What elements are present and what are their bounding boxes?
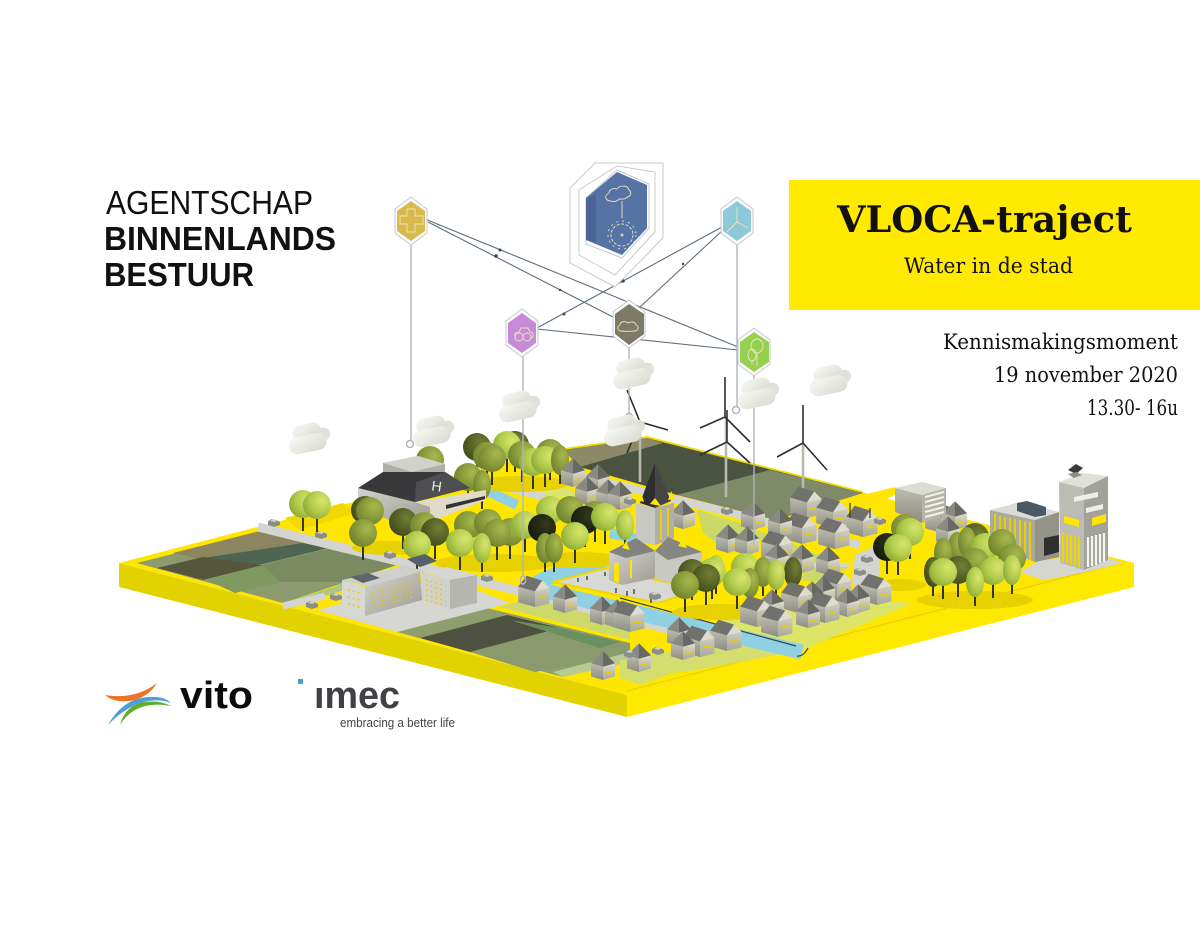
window grids bbox=[348, 580, 446, 608]
walls bbox=[358, 488, 430, 522]
farmland: middle front field bbox=[397, 608, 630, 677]
platform: isometric yellow town base bbox=[119, 436, 1134, 717]
large hospital building with windows bbox=[342, 554, 477, 616]
event details text: Kennismakingsmoment bbox=[943, 330, 1179, 354]
plazas bbox=[285, 503, 1122, 632]
clouds bbox=[287, 356, 852, 456]
title panel: VLOCA-traject bbox=[789, 180, 1200, 310]
cars on roads bbox=[268, 497, 873, 658]
hexagon: green (trees) bbox=[738, 328, 770, 376]
icon: cloud and gear bbox=[606, 186, 636, 249]
nave right bbox=[655, 551, 702, 583]
turbine 1 bbox=[627, 390, 668, 482]
logo: Agentschap Binnenlands Bestuur: BINNENLANDS bbox=[104, 220, 336, 257]
network lines between hexagons bbox=[425, 219, 738, 350]
logo: Agentschap Binnenlands Bestuur: AGENTSCHAP bbox=[106, 184, 313, 221]
people on plaza bbox=[578, 572, 651, 603]
hexagon: energy (cyan) bbox=[721, 197, 753, 245]
event details text bbox=[943, 330, 1179, 420]
event details text: 13.30- 16u bbox=[1087, 396, 1178, 420]
turbines 2 and 3 bbox=[700, 377, 750, 497]
subtitle: Water in de stad bbox=[904, 254, 1073, 278]
H mark: H bbox=[431, 477, 443, 495]
logo: imec: embracing a better life bbox=[340, 716, 455, 730]
back tree grove bbox=[416, 431, 569, 509]
hexagon: health (gold) bbox=[395, 197, 427, 245]
hexagon: central data platform (blue) bbox=[570, 163, 663, 287]
logo: vito bbox=[105, 675, 253, 725]
church bbox=[578, 463, 702, 603]
tree shadows on the ground bbox=[352, 476, 1033, 620]
platform left side face bbox=[119, 563, 627, 717]
canal bbox=[488, 491, 808, 656]
carport roof bbox=[843, 487, 895, 507]
roof plant boxes bbox=[350, 573, 380, 583]
yellow turrets bbox=[650, 498, 661, 506]
logo: vito: vito bbox=[180, 675, 253, 717]
heading: VLOCA-traject bbox=[836, 199, 1132, 241]
front houses bbox=[518, 569, 891, 680]
logo: Agentschap Binnenlands Bestuur: BESTUUR bbox=[104, 256, 254, 293]
tower faces bbox=[636, 503, 655, 545]
tree grove by the church bbox=[671, 553, 802, 612]
right tree grove bbox=[873, 514, 1026, 606]
wind turbines bbox=[627, 377, 827, 497]
platform top surface bbox=[119, 436, 1134, 695]
upper box bbox=[383, 456, 445, 483]
roads bbox=[258, 472, 880, 645]
pin lines from hexagons to the ground bbox=[406, 245, 754, 584]
tree grove centre-left bbox=[289, 490, 634, 572]
helipad hospital building bbox=[358, 456, 486, 522]
office building with carport bbox=[843, 482, 946, 525]
logo: imec: ımec bbox=[314, 675, 400, 717]
parcels: light green gardens bbox=[500, 487, 913, 685]
dark roof bbox=[358, 472, 470, 502]
event details text: 19 november 2020 bbox=[994, 363, 1178, 387]
edge highlight bbox=[627, 563, 1120, 691]
houses behind the church road bbox=[561, 458, 967, 575]
factory and tower bbox=[990, 464, 1108, 570]
church plaza bbox=[553, 568, 700, 603]
hexagon: weather (grey) bbox=[613, 300, 645, 348]
spire bbox=[640, 463, 655, 508]
hexagon: mobility (purple) bbox=[506, 309, 538, 357]
logo: Agentschap Binnenlands Bestuur bbox=[104, 184, 336, 293]
platform right side face bbox=[627, 563, 1134, 717]
turbine 4 bbox=[777, 405, 827, 497]
logo: imec bbox=[298, 675, 455, 730]
nave left bbox=[609, 550, 655, 585]
low block bbox=[990, 502, 1059, 520]
farmland: left field bbox=[137, 531, 397, 606]
tower bbox=[1059, 473, 1108, 488]
farmland: back field with wind turbines bbox=[563, 437, 863, 520]
